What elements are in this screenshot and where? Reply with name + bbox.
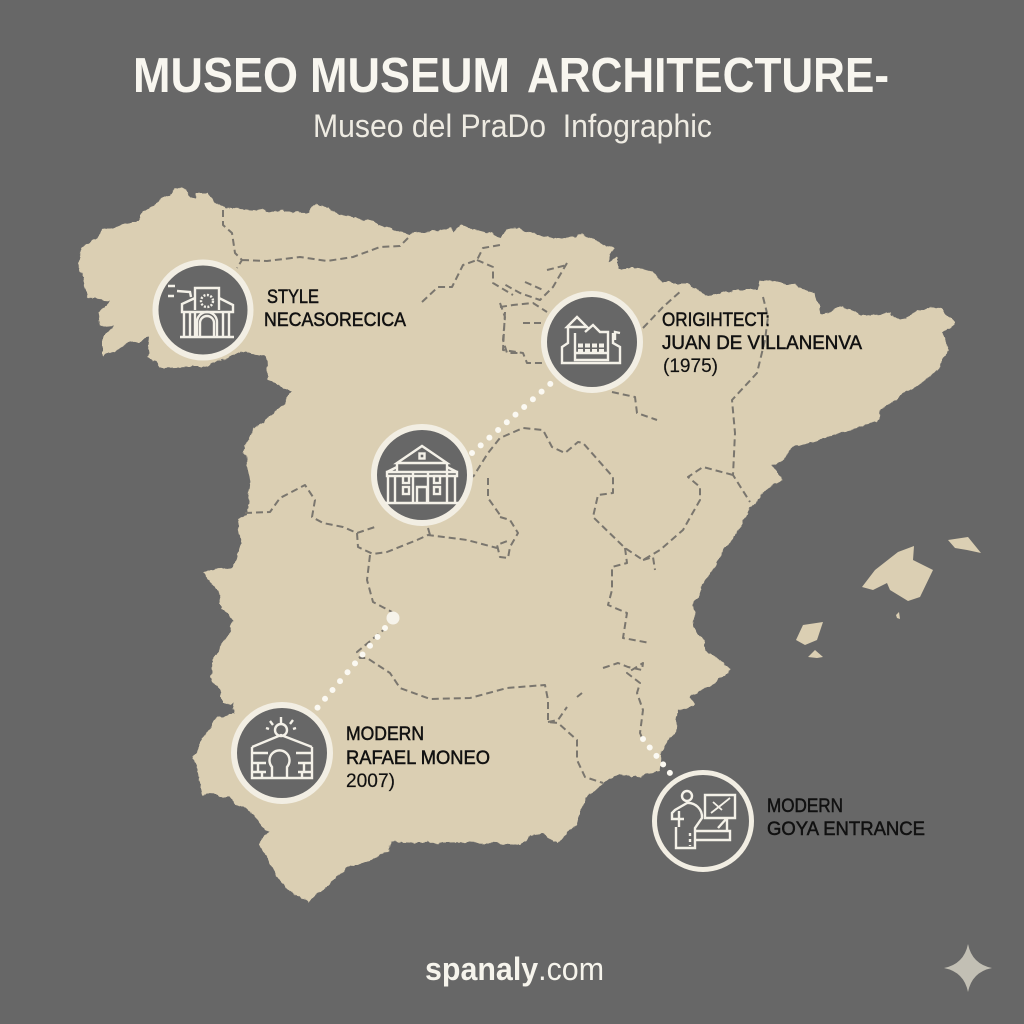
mainland: [78, 188, 955, 902]
label: Goya entrance: GOYA ENTRANCE: [767, 819, 925, 840]
marker: central building circle: [374, 427, 470, 523]
label: architect: ORIGIHTECT:: [662, 310, 770, 331]
dotted connector: coast to Goya circle: [643, 739, 670, 773]
label: Moneo: MODERN: [346, 724, 424, 745]
marker: style circle: [156, 262, 250, 358]
marker: architect circle: [544, 294, 640, 390]
label: Goya entrance: MODERN: [767, 796, 843, 817]
title: [133, 49, 889, 103]
dotted connector: centre circle to architect circle: [472, 378, 557, 453]
marker: Moneo circle: [234, 705, 330, 801]
icon: villa building: [562, 317, 620, 363]
label: architect: (1975): [663, 356, 718, 377]
label: architect: [662, 310, 862, 377]
map of Spain: [78, 188, 981, 902]
icon: Prado facade: [385, 446, 459, 503]
footer brand: spanaly.com: [425, 951, 604, 987]
icon: sparkle star: [944, 944, 992, 992]
icon: neoclassical museum: [168, 286, 234, 337]
title: MUSEUM: [310, 49, 510, 103]
marker: Goya entrance circle: [654, 772, 752, 870]
map pin: [386, 612, 400, 624]
subtitle: Museo del PraDo Infographic: [313, 108, 712, 144]
label: style: STYLE: [267, 287, 319, 308]
title: ARCHITECTURE-: [527, 49, 889, 103]
label: Moneo: RAFAEL MONEO: [346, 748, 490, 769]
title: MUSEO: [133, 49, 298, 103]
regional borders: [223, 210, 768, 783]
icon: presenter with chart: [672, 791, 735, 848]
icon: modern extension with sun: [252, 717, 312, 778]
label: Moneo: 2007): [346, 771, 395, 792]
balearic islands: [796, 537, 981, 658]
label: style: [264, 287, 406, 331]
label: style: NECASORECICA: [264, 310, 406, 331]
label: Goya entrance: [767, 796, 925, 840]
label: Moneo: [346, 724, 490, 792]
label: architect: JUAN DE VILLANENVA: [662, 333, 862, 354]
dotted connector: map pin to Moneo circle: [313, 628, 385, 713]
